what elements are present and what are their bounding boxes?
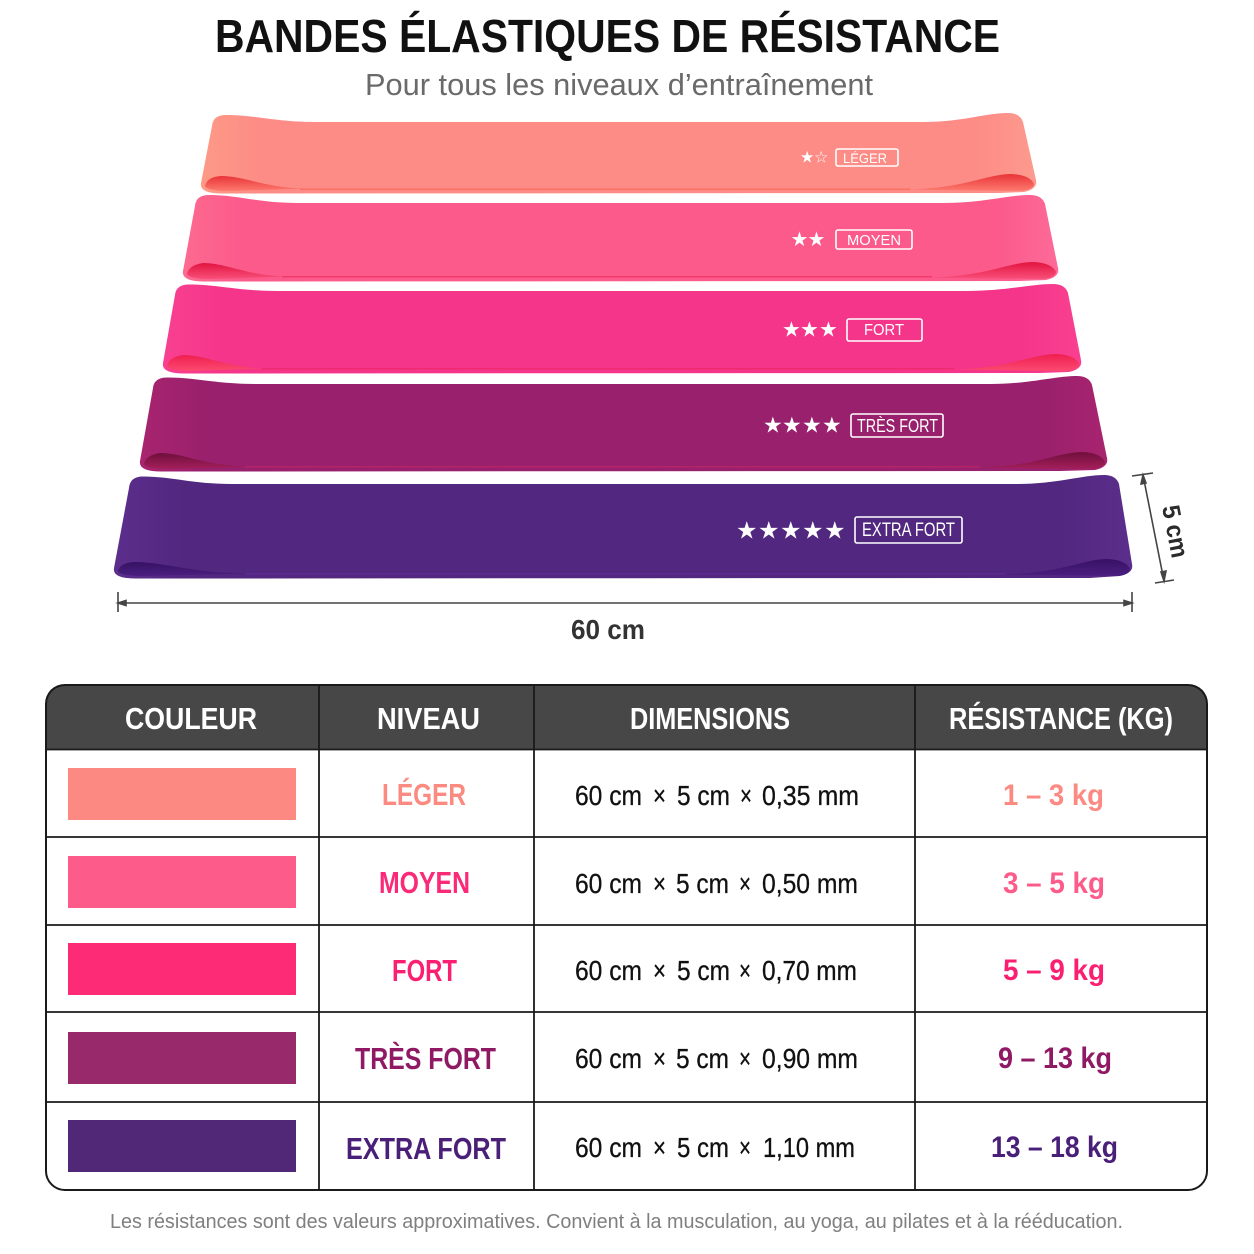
row: extra fort: 5 cm — [677, 1132, 729, 1163]
label: 60 cm: 60 cm — [571, 614, 645, 645]
badge: fort: FORT — [864, 322, 904, 339]
row: moyen: MOYEN — [379, 865, 470, 900]
table header row: NIVEAU — [377, 701, 480, 736]
row: extra fort: 13 – 18 kg — [991, 1131, 1118, 1164]
row: moyen — [68, 856, 1105, 908]
row: fort: 0,70 mm — [762, 955, 857, 986]
row: moyen: × — [739, 868, 751, 899]
row: extra fort: 1,10 mm — [763, 1132, 855, 1163]
badge: moyen: MOYEN — [847, 233, 901, 249]
row: très fort: 0,90 mm — [762, 1043, 858, 1074]
row: léger: 1 – 3 kg — [1003, 779, 1104, 812]
row: léger: × — [653, 780, 666, 811]
badge: moyen — [836, 230, 912, 249]
band: extra fort — [114, 475, 1132, 579]
badge: extra fort: EXTRA FORT — [862, 520, 955, 541]
row: moyen: 5 cm — [676, 868, 729, 899]
stars: extra fort: ★★★★★ — [736, 516, 846, 544]
row: très fort: × — [653, 1043, 666, 1074]
stars: très fort: ★★★★ — [763, 414, 842, 439]
row: léger: 0,35 mm — [762, 780, 859, 811]
title: BANDES ÉLASTIQUES DE RÉSISTANCE — [215, 10, 1000, 62]
badge: fort — [847, 319, 922, 341]
row: fort: 5 – 9 kg — [1003, 954, 1105, 987]
footnote: Les résistances sont des valeurs approximatives. Convient à la musculation, au yoga, au pilates et à la rééducation. — [110, 1210, 1123, 1233]
band: fort — [163, 284, 1081, 374]
row: fort: × — [739, 955, 751, 986]
label: 5 cm: 5 cm — [1156, 503, 1194, 560]
row: extra fort: × — [739, 1132, 751, 1163]
row: très fort: × — [739, 1043, 751, 1074]
row: fort: 5 cm — [677, 955, 730, 986]
stars: moyen: ★★ — [790, 227, 825, 251]
table header background — [46, 685, 1207, 749]
table header row: RÉSISTANCE (KG) — [949, 701, 1173, 736]
row: léger: 60 cm — [575, 780, 642, 811]
row: extra fort: EXTRA FORT — [346, 1131, 506, 1166]
band: moyen — [183, 195, 1058, 282]
stars: fort: ★★★ — [782, 318, 838, 342]
badge: léger: LÉGER — [843, 151, 887, 166]
table header row — [125, 701, 1173, 736]
row: très fort — [68, 1032, 1112, 1084]
band: léger — [201, 113, 1036, 194]
table header row: DIMENSIONS — [630, 701, 790, 736]
table — [46, 685, 1207, 1190]
row: moyen: 60 cm — [575, 868, 642, 899]
row: extra fort: × — [653, 1132, 666, 1163]
table header row: COULEUR — [125, 701, 257, 736]
row: fort: × — [653, 955, 666, 986]
stars: léger: ★☆ — [800, 148, 828, 167]
row: très fort: TRÈS FORT — [355, 1041, 496, 1076]
row: léger: × — [740, 780, 752, 811]
row: fort: FORT — [392, 953, 457, 988]
subtitle: Pour tous les niveaux d’entraînement — [365, 67, 873, 102]
band: très fort — [140, 376, 1107, 472]
row: très fort: 5 cm — [676, 1043, 729, 1074]
badge: léger — [836, 149, 898, 166]
row: très fort: 60 cm — [575, 1043, 642, 1074]
row: très fort: 9 – 13 kg — [998, 1042, 1112, 1075]
row: moyen: 3 – 5 kg — [1003, 867, 1105, 900]
row: moyen: × — [653, 868, 666, 899]
row: extra fort — [68, 1120, 1118, 1172]
row: fort: 60 cm — [575, 955, 642, 986]
row: extra fort: 60 cm — [575, 1132, 642, 1163]
dimension arrow: 5 cm — [1132, 473, 1174, 583]
row: léger: 5 cm — [677, 780, 730, 811]
badge: très fort: TRÈS FORT — [857, 416, 938, 436]
row: léger — [68, 768, 1104, 820]
row: léger: LÉGER — [382, 777, 466, 812]
row: moyen: 0,50 mm — [762, 868, 858, 899]
dimension arrow: 60 cm — [118, 592, 1132, 612]
badge: extra fort — [855, 517, 962, 543]
row: fort — [68, 943, 1105, 995]
